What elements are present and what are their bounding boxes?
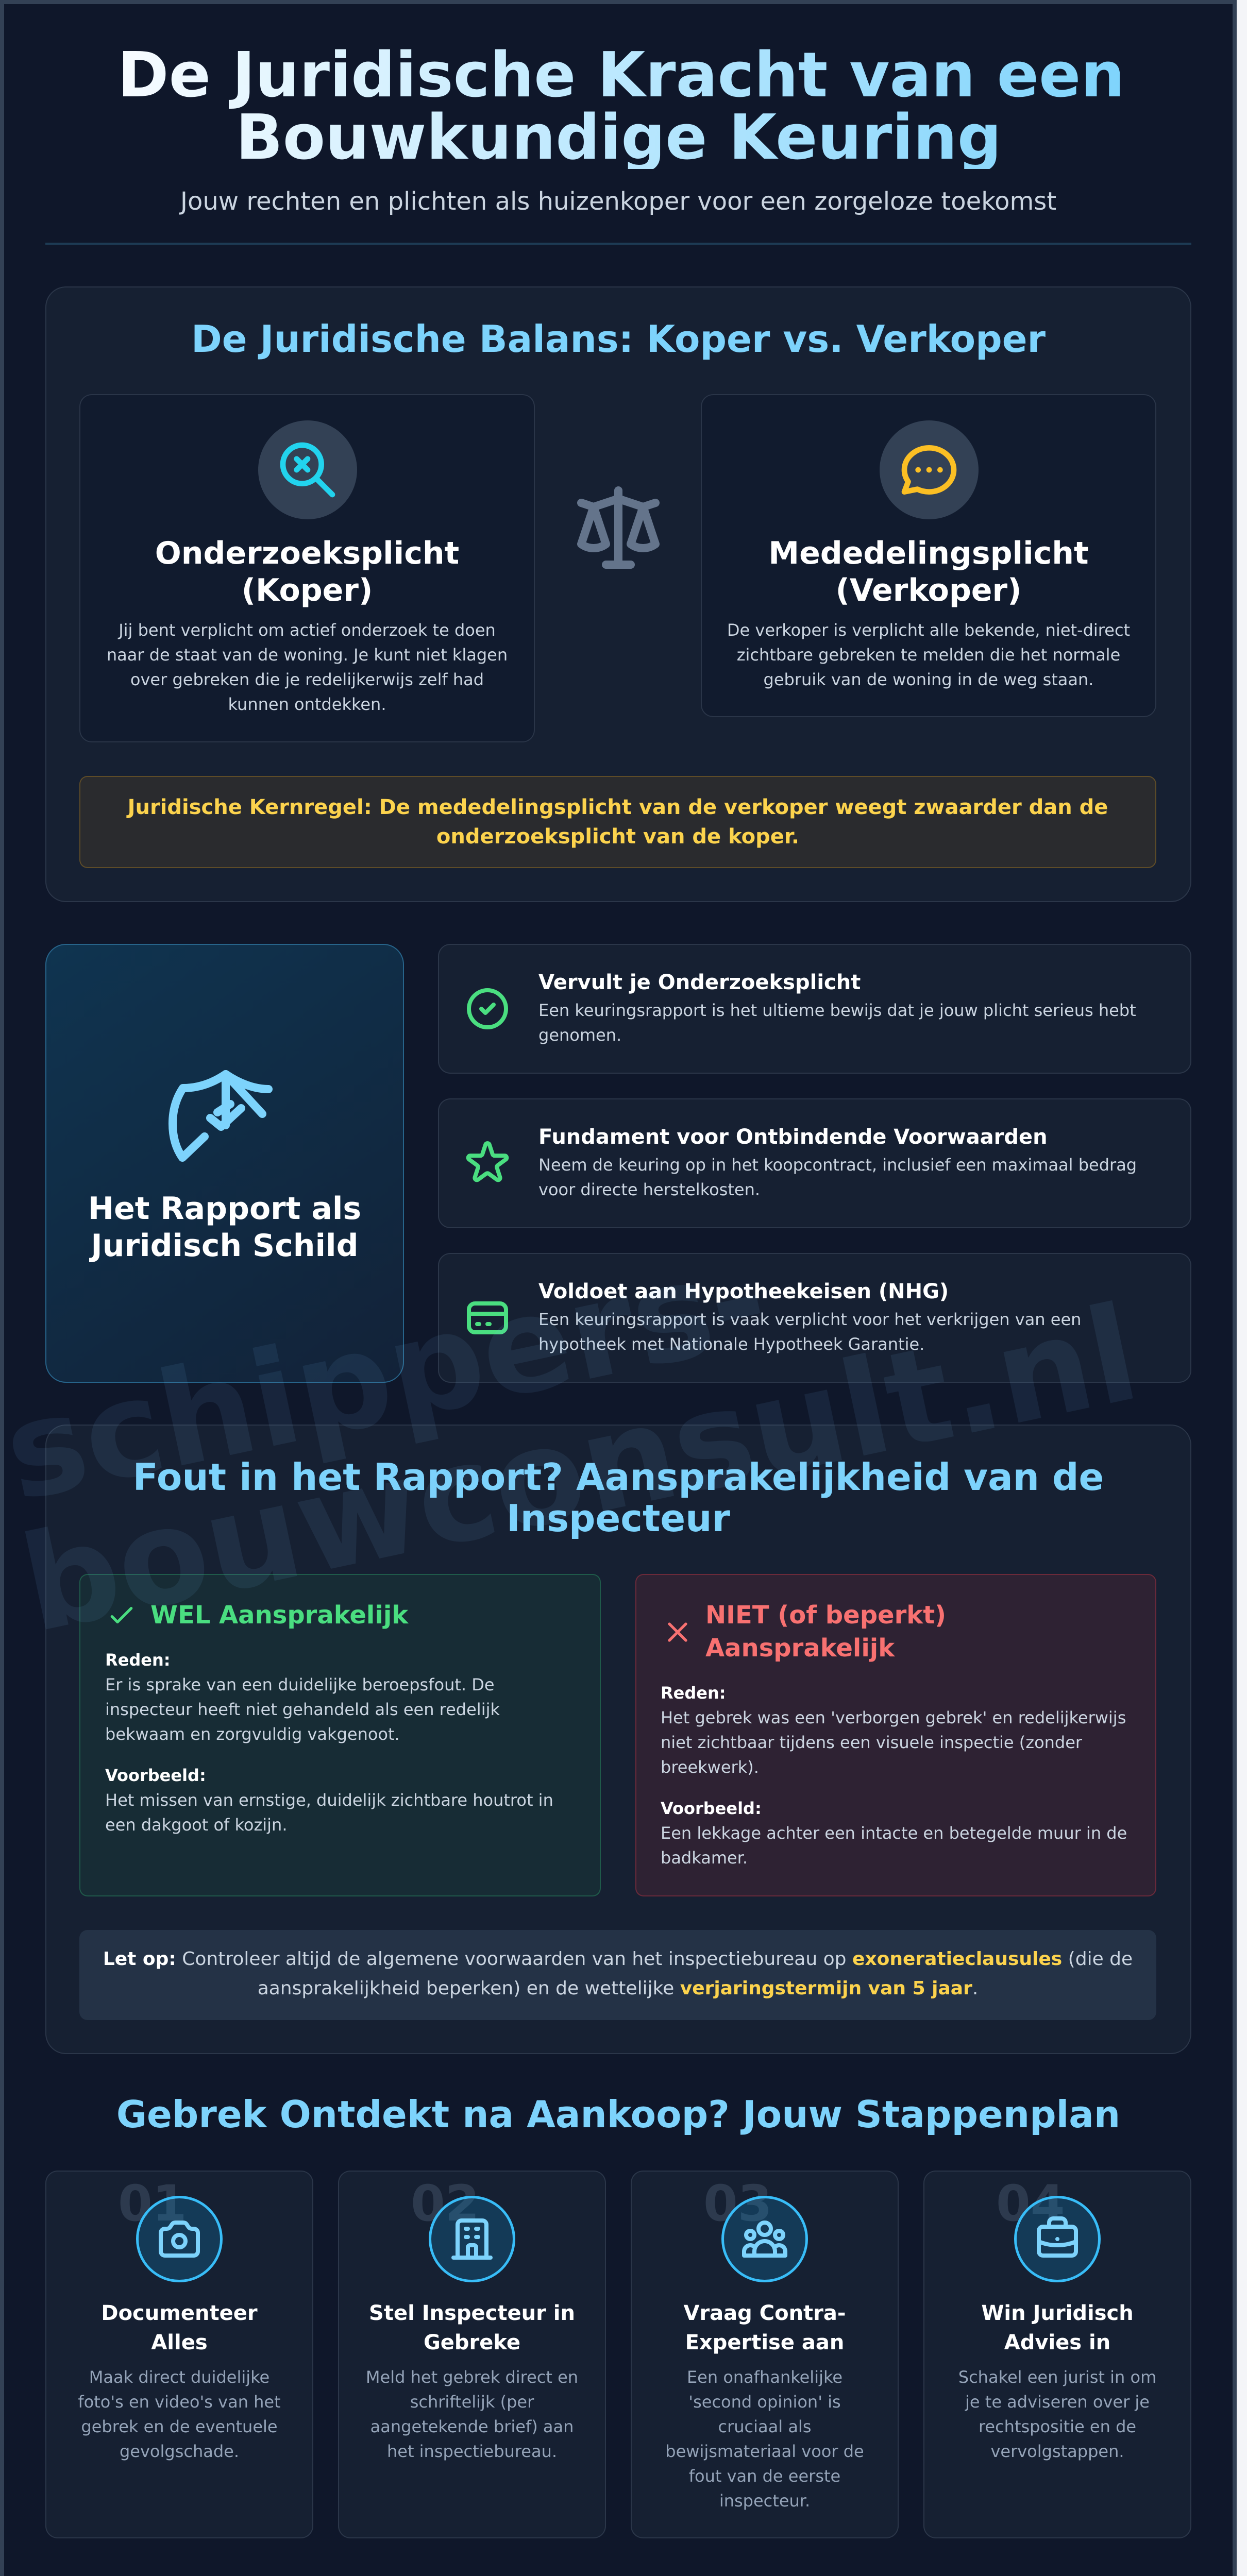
card title: Onderzoeksplicht (155, 535, 459, 571)
heading: stappenplan: Gebrek Ontdekt na Aankoop? Jouw Stappenplan (116, 2093, 1120, 2136)
step text: Schakel een jurist in om (958, 2367, 1156, 2387)
card title: (Verkoper) (835, 572, 1022, 608)
card text (727, 620, 1130, 689)
voorbeeld (105, 1766, 553, 1835)
card heading (705, 1601, 946, 1663)
reden: Reden: (661, 1683, 726, 1703)
callout: let op: aansprakelijkheid beperken) en de wettelijke verjaringstermijn van 5 jaar. (258, 1978, 978, 1999)
step text (45, 2365, 313, 2464)
step text: het inspectiebureau. (387, 2442, 557, 2461)
heading: balans: De Juridische Balans: Koper vs. Verkoper (191, 317, 1046, 361)
item title: Vervult je Onderzoeksplicht (538, 971, 861, 994)
panel title: Het Rapport als (88, 1191, 361, 1227)
icon: cross (668, 1622, 687, 1642)
step title (338, 2299, 606, 2358)
callout: juridische kernregel: Juridische Kernregel: De mededelingsplicht van de verkoper weegt zwaarder dan de (128, 795, 1108, 819)
step text: inspecteur. (719, 2491, 810, 2511)
panel title: Juridisch Schild (91, 1227, 359, 1263)
icon: office building (429, 2196, 515, 2282)
voorbeeld: Een lekkage achter een intacte en betegelde muur in de (661, 1823, 1127, 1843)
item text: voor directe herstelkosten. (538, 1180, 760, 1199)
watermark: schippers- (0, 1220, 780, 1531)
step text: bewijsmateriaal voor de (665, 2442, 864, 2461)
voorbeeld: Voorbeeld: (105, 1766, 206, 1785)
item text: Neem de keuring op in het koopcontract, inclusief een maximaal bedrag (538, 1155, 1137, 1175)
step title: Stel Inspecteur in (369, 2301, 575, 2325)
step title: Alles (151, 2331, 208, 2354)
item text (538, 1155, 1137, 1199)
step text: Maak direct duidelijke (89, 2367, 269, 2387)
icon: camera (136, 2196, 223, 2282)
panel: de juridische balans (45, 286, 1191, 902)
panel: het rapport als juridisch schild (45, 944, 404, 1383)
voorbeeld: een dakgoot of kozijn. (105, 1815, 287, 1835)
card: wel aansprakelijk (79, 1574, 601, 1896)
step text: aangetekende brief) aan (370, 2417, 574, 2436)
panel title (88, 1191, 361, 1263)
step text: je te adviseren over je (965, 2392, 1150, 2412)
panel: aansprakelijkheid inspecteur (45, 1425, 1191, 2054)
card heading: WEL Aansprakelijk (150, 1601, 408, 1630)
card text: naar de staat van de woning. Je kunt niet klagen (107, 645, 508, 665)
step title: Vraag Contra- (683, 2301, 846, 2325)
reden: inspecteur heeft niet gehandeld als een redelijk (105, 1700, 500, 1719)
icon: chat bubble (880, 420, 979, 519)
step title: Gebreke (424, 2331, 520, 2354)
heading: fout in het rapport (133, 1455, 1104, 1540)
icon: star (466, 1141, 509, 1182)
icon: check circle (467, 988, 508, 1029)
subtitle: Jouw rechten en plichten als huizenkoper voor een zorgeloze toekomst (180, 187, 1056, 216)
step title: Expertise aan (685, 2331, 844, 2354)
step text: gevolgschade. (120, 2442, 239, 2461)
reden: Reden: (105, 1650, 171, 1670)
steps (45, 2171, 1191, 2538)
card title: (Koper) (242, 572, 373, 608)
step 3 (631, 2171, 899, 2538)
card: voldoet aan hypotheekeisen (438, 1253, 1191, 1383)
title (117, 44, 1120, 169)
step text (631, 2365, 899, 2513)
title: Bouwkundige Keuring (235, 102, 1002, 174)
step text (338, 2365, 606, 2464)
card heading: NIET (of beperkt) (705, 1601, 946, 1630)
step 1: 01 (118, 2175, 187, 2232)
card title (768, 535, 1089, 608)
card: onderzoeksplicht koper (79, 394, 535, 742)
step text: Een onafhankelijke (687, 2367, 842, 2387)
card text: over gebreken die je redelijkerwijs zelf had (130, 670, 484, 689)
item text: hypotheek met Nationale Hypotheek Garantie. (538, 1334, 924, 1354)
heading: fout in het rapport: Inspecteur (507, 1497, 730, 1540)
voorbeeld: Het missen van ernstige, duidelijk zichtbare houtrot in (105, 1790, 553, 1810)
icon: people group (721, 2196, 808, 2282)
watermark: bouwconsult.nl (10, 1277, 1150, 1663)
step text: Meld het gebrek direct en (366, 2367, 578, 2387)
step title (923, 2299, 1191, 2358)
step 4 (923, 2171, 1191, 2538)
card title: Mededelingsplicht (768, 535, 1089, 571)
step text: foto's en video's van het (78, 2392, 281, 2412)
reden: bekwaam en zorgvuldig vakgenoot. (105, 1724, 400, 1744)
icon: credit card (467, 1301, 508, 1334)
card text (107, 620, 508, 714)
icon: check (110, 1607, 133, 1623)
step 1 (45, 2171, 313, 2538)
step title: Win Juridisch (981, 2301, 1134, 2325)
step title: Documenteer (101, 2301, 258, 2325)
card text: gebruik van de woning in de weg staan. (764, 670, 1093, 689)
section: rapport als juridisch schild (45, 944, 1191, 1383)
callout: juridische kernregel (79, 776, 1156, 868)
title: De Juridische Kracht van een (117, 40, 1125, 111)
item title: Voldoet aan Hypotheekeisen (NHG) (538, 1280, 949, 1303)
reden: Het gebrek was een 'verborgen gebrek' en redelijkerwijs (661, 1708, 1126, 1727)
step text: fout van de eerste (689, 2466, 840, 2486)
step text: schriftelijk (per (410, 2392, 534, 2412)
card text: De verkoper is verplicht alle bekende, niet-direct (727, 620, 1130, 640)
card: vervult je onderzoeksplicht (438, 944, 1191, 1074)
step text: cruciaal als (718, 2417, 811, 2436)
card: fundament voor ontbindende voorwaarden (438, 1098, 1191, 1228)
heading: fout in het rapport: Fout in het Rapport? Aansprakelijkheid van de (133, 1455, 1104, 1499)
reden: Er is sprake van een duidelijke beroepsfout. De (105, 1675, 495, 1694)
icon: broken shield (168, 1070, 273, 1162)
icon: search with cross (258, 420, 357, 519)
step text: vervolgstappen. (990, 2442, 1124, 2461)
callout: let op: Let op: Controleer altijd de algemene voorwaarden van het inspectiebureau op exoneratieclausules (die de (103, 1948, 1133, 1970)
card title (155, 535, 459, 608)
icon: scales (577, 486, 660, 569)
reden (661, 1683, 1126, 1777)
card text: zichtbare gebreken te melden die het normale (737, 645, 1120, 665)
step title: Advies in (1004, 2331, 1110, 2354)
voorbeeld: Voorbeeld: (661, 1799, 762, 1818)
icon: briefcase (1014, 2196, 1101, 2282)
card heading: Aansprakelijk (705, 1634, 895, 1663)
step text: 'second opinion' is (688, 2392, 841, 2412)
card: mededelingsplicht verkoper (701, 394, 1156, 717)
item text (538, 1310, 1081, 1354)
item text: Een keuringsrapport is het ultieme bewijs dat je jouw plicht serieus hebt (538, 1001, 1136, 1020)
card: niet aansprakelijk (635, 1574, 1156, 1896)
item text (538, 1001, 1136, 1045)
step 3: 03 (703, 2175, 772, 2232)
step title (631, 2299, 899, 2358)
callout: juridische kernregel: onderzoeksplicht van de koper. (436, 824, 799, 848)
step 4: 04 (996, 2175, 1065, 2232)
voorbeeld: badkamer. (661, 1848, 748, 1868)
step 2: 02 (411, 2175, 480, 2232)
step text: rechtspositie en de (979, 2417, 1136, 2436)
reden: breekwerk). (661, 1757, 759, 1777)
item text: Een keuringsrapport is vaak verplicht voor het verkrijgen van een (538, 1310, 1081, 1329)
step text: gebrek en de eventuele (81, 2417, 278, 2436)
voorbeeld (661, 1799, 1127, 1868)
reden (105, 1650, 500, 1744)
item title: Fundament voor Ontbindende Voorwaarden (538, 1125, 1048, 1149)
step text (923, 2365, 1191, 2464)
card text: Jij bent verplicht om actief onderzoek te doen (119, 620, 496, 640)
step 2 (338, 2171, 606, 2538)
step title (101, 2301, 258, 2354)
card text: kunnen ontdekken. (228, 694, 386, 714)
callout: let op (79, 1930, 1156, 2020)
item text: genomen. (538, 1025, 621, 1045)
reden: niet zichtbaar tijdens een visuele inspectie (zonder (661, 1733, 1082, 1752)
